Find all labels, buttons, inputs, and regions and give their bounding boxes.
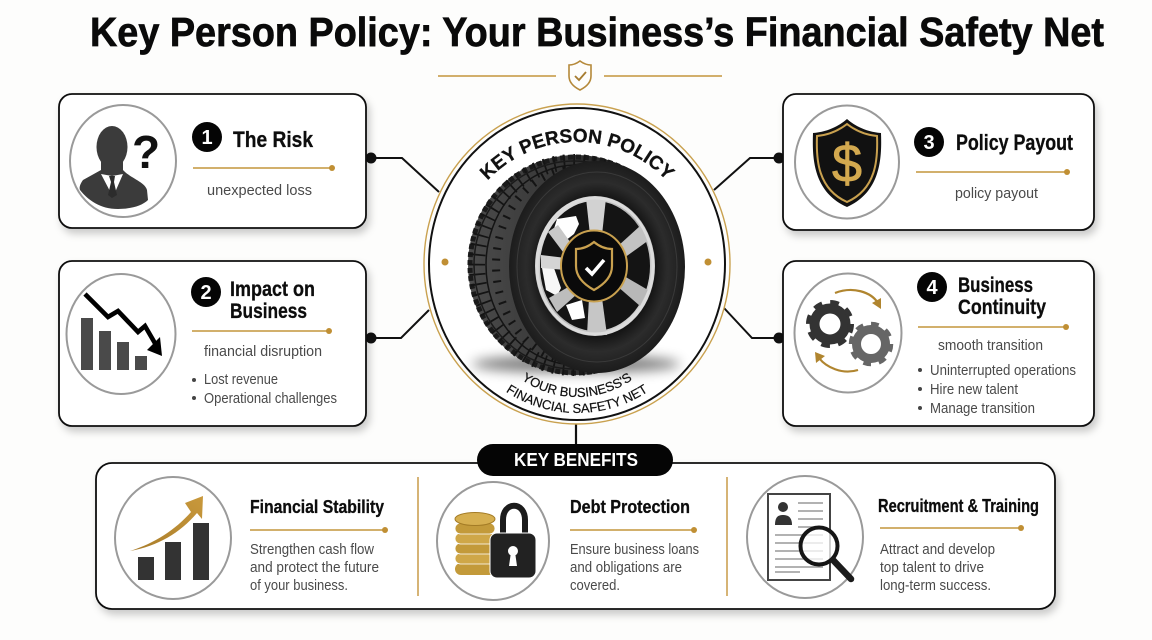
number badge 1: 1 <box>201 127 213 149</box>
icon: gears with arrows <box>794 274 902 392</box>
heading: Business <box>958 274 1033 297</box>
title divider with shield icon <box>438 61 722 90</box>
number badge 3: 3 <box>923 132 935 154</box>
icon: tire with shield hub <box>468 155 685 375</box>
description <box>880 542 995 594</box>
heading: Policy Payout <box>956 130 1074 155</box>
benefit: financial stability <box>115 477 388 599</box>
benefit: debt protection <box>437 482 699 600</box>
panel: key benefits <box>96 444 1055 609</box>
description: and obligations are <box>570 560 682 576</box>
curved heading: key person policy: KEY PERSON POLICY <box>479 128 676 180</box>
connector: continuity to centre <box>724 308 784 344</box>
benefit: recruitment and training <box>747 476 1039 598</box>
key benefits pill: KEY BENEFITS <box>514 450 638 470</box>
rule <box>916 169 1070 175</box>
heading: Business <box>230 300 307 323</box>
connector: impact to centre <box>366 310 429 344</box>
number badge 4: 4 <box>926 277 938 299</box>
icon: person with question mark <box>70 105 176 217</box>
rule <box>918 324 1069 330</box>
bullet list: Uninterrupted operations <box>930 363 1076 379</box>
bullet list <box>192 372 337 407</box>
rule <box>192 328 332 334</box>
heading <box>958 274 1046 319</box>
description: Strengthen cash flow <box>250 542 374 558</box>
description: of your business. <box>250 578 348 594</box>
description: Ensure business loans <box>570 542 699 558</box>
caption: smooth transition <box>938 338 1043 354</box>
wheel spokes <box>541 198 649 335</box>
heading: Impact on <box>230 278 315 301</box>
bullet list <box>918 363 1076 417</box>
caption: policy payout <box>955 186 1038 202</box>
wheel windows <box>553 216 579 241</box>
curved tagline: FINANCIAL SAFETY NET <box>506 384 646 414</box>
panel: 3 policy payout <box>783 94 1094 230</box>
rule <box>193 165 335 171</box>
description: covered. <box>570 578 620 594</box>
icon: coins and padlock <box>437 482 549 600</box>
rule <box>880 525 1024 531</box>
description <box>570 542 699 594</box>
number badge 1 <box>192 122 222 152</box>
description: Attract and develop <box>880 542 995 558</box>
rule <box>250 527 388 533</box>
description: long-term success. <box>880 578 991 594</box>
heading: Financial Stability <box>250 497 384 517</box>
bullet list: Hire new talent <box>930 382 1018 398</box>
icon: falling bar chart <box>66 274 176 394</box>
curved tagline: YOUR BUSINESS'S <box>524 372 632 398</box>
heading: Continuity <box>958 296 1046 319</box>
rule <box>570 527 697 533</box>
bullet list: Operational challenges <box>204 391 337 407</box>
caption: unexpected loss <box>207 183 312 199</box>
panel: 4 business continuity <box>783 261 1094 426</box>
icon: dollar shield: $ <box>832 134 862 194</box>
heading <box>230 278 315 323</box>
tire shadow <box>472 355 680 373</box>
connector: payout to centre <box>714 152 784 190</box>
description <box>250 542 379 594</box>
panel: 1 the risk <box>59 94 366 228</box>
number badge 4 <box>917 272 947 302</box>
icon: person with question mark: ? <box>132 126 160 178</box>
heading: The Risk <box>233 127 314 152</box>
bullet list: Manage transition <box>930 401 1035 417</box>
number badge 2 <box>191 277 221 307</box>
heading: Recruitment & Training <box>878 496 1039 516</box>
connector: centre to key benefits <box>575 424 577 446</box>
panel: central tire emblem <box>423 103 731 425</box>
icon: dollar shield <box>795 106 899 218</box>
caption: financial disruption <box>204 344 322 360</box>
number badge 2: 2 <box>200 282 212 304</box>
connector: risk to centre <box>366 152 439 192</box>
heading: Debt Protection <box>570 497 690 517</box>
bullet list: Lost revenue <box>204 372 278 388</box>
icon: resume and magnifier <box>747 476 863 598</box>
description: and protect the future <box>250 560 379 576</box>
key benefits pill <box>477 444 673 476</box>
number badge 3 <box>914 127 944 157</box>
description: top talent to drive <box>880 560 984 576</box>
panel: 2 impact on business <box>59 261 366 426</box>
icon: growth chart <box>115 477 231 599</box>
